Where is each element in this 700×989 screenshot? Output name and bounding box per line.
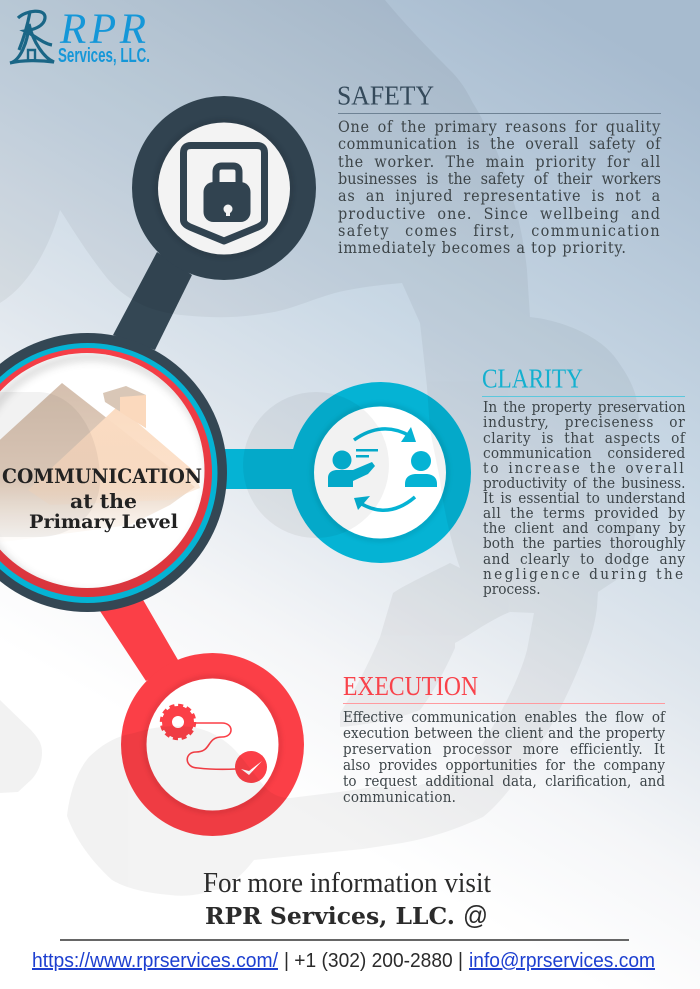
clarity circle bbox=[290, 382, 471, 563]
text: clarity: communication considered bbox=[482, 444, 685, 462]
house watermark bbox=[0, 357, 210, 595]
safety circle bbox=[132, 96, 316, 280]
text: execution: also provides opportunities for the company bbox=[343, 756, 665, 774]
footer contact line: info@rprservices.com bbox=[469, 950, 655, 972]
text: clarity: In the property preservation bbox=[482, 398, 685, 416]
text: safety bbox=[338, 117, 662, 257]
text: execution: execution between the client and the property bbox=[343, 724, 665, 742]
footer contact line: https://www.rprservices.com/ bbox=[32, 950, 278, 972]
central title: Primary Level bbox=[29, 511, 178, 533]
connector: execution bbox=[96, 598, 178, 681]
text: safety: as an injured representative is not a bbox=[338, 186, 661, 205]
text: safety: businesses is the safety of their workers bbox=[338, 169, 661, 188]
text: clarity: and clearly to dodge any bbox=[482, 550, 685, 568]
execution circle bbox=[121, 653, 304, 836]
text: safety: communication is the overall safety of bbox=[338, 134, 661, 153]
text: clarity: the client and company by bbox=[482, 519, 685, 537]
footer contact line: | +1 (302) 200-2880 | bbox=[284, 950, 463, 972]
heading: clarity: CLARITY bbox=[482, 364, 583, 394]
icon: shield with padlock bbox=[184, 146, 264, 241]
text: clarity bbox=[482, 398, 686, 598]
text: clarity: It is essential to understand bbox=[482, 489, 685, 507]
text: clarity: clarity is that aspects of bbox=[482, 429, 685, 447]
text: execution: Effective communication enables the flow of bbox=[343, 708, 665, 726]
logo: Services, LLC. bbox=[58, 44, 150, 67]
central circle bbox=[0, 333, 227, 612]
footer call to action: @ bbox=[463, 900, 488, 930]
text: clarity: negligence during the bbox=[482, 565, 685, 583]
connector: safety bbox=[113, 252, 192, 350]
text: safety: immediately becomes a top priority. bbox=[338, 238, 627, 257]
footer contact line bbox=[32, 950, 655, 972]
logo wordmark: RPR bbox=[59, 6, 146, 53]
text: clarity: process. bbox=[482, 580, 540, 598]
footer call to action: RPR Services, LLC. bbox=[205, 903, 455, 930]
footer rule bbox=[60, 939, 629, 941]
text: clarity: to increase the overall bbox=[482, 459, 685, 477]
text: clarity: both the parties thoroughly bbox=[482, 534, 685, 552]
logo house mark bbox=[10, 11, 54, 63]
connector: clarity bbox=[222, 449, 297, 489]
text: execution: to request additional data, clarification, and bbox=[343, 772, 665, 790]
footer call to action: For more information visit bbox=[203, 867, 491, 899]
text: safety: One of the primary reasons for quality bbox=[338, 117, 661, 136]
heading: execution: EXECUTION bbox=[343, 671, 478, 701]
icon: two people exchanging bbox=[328, 427, 437, 510]
heading: safety: SAFETY bbox=[337, 80, 434, 110]
text: safety: productive one. Since wellbeing and bbox=[338, 204, 661, 223]
central title bbox=[2, 464, 202, 533]
text: clarity: productivity of the business. bbox=[482, 474, 685, 492]
text: safety: safety comes first, communication bbox=[338, 221, 661, 240]
text: execution bbox=[343, 708, 666, 806]
text: safety: the worker. The main priority for all bbox=[338, 152, 661, 171]
text: clarity: all the terms provided by bbox=[482, 504, 685, 522]
icon: gear to check path bbox=[162, 706, 267, 783]
central title: at the bbox=[70, 489, 137, 513]
text: execution: communication. bbox=[343, 788, 456, 806]
text: execution: preservation processor more efficiently. It bbox=[343, 740, 665, 758]
logo bbox=[10, 6, 150, 67]
text: clarity: industry, preciseness or bbox=[482, 413, 685, 431]
central title: COMMUNICATION bbox=[2, 464, 202, 488]
footer call to action bbox=[203, 867, 491, 930]
